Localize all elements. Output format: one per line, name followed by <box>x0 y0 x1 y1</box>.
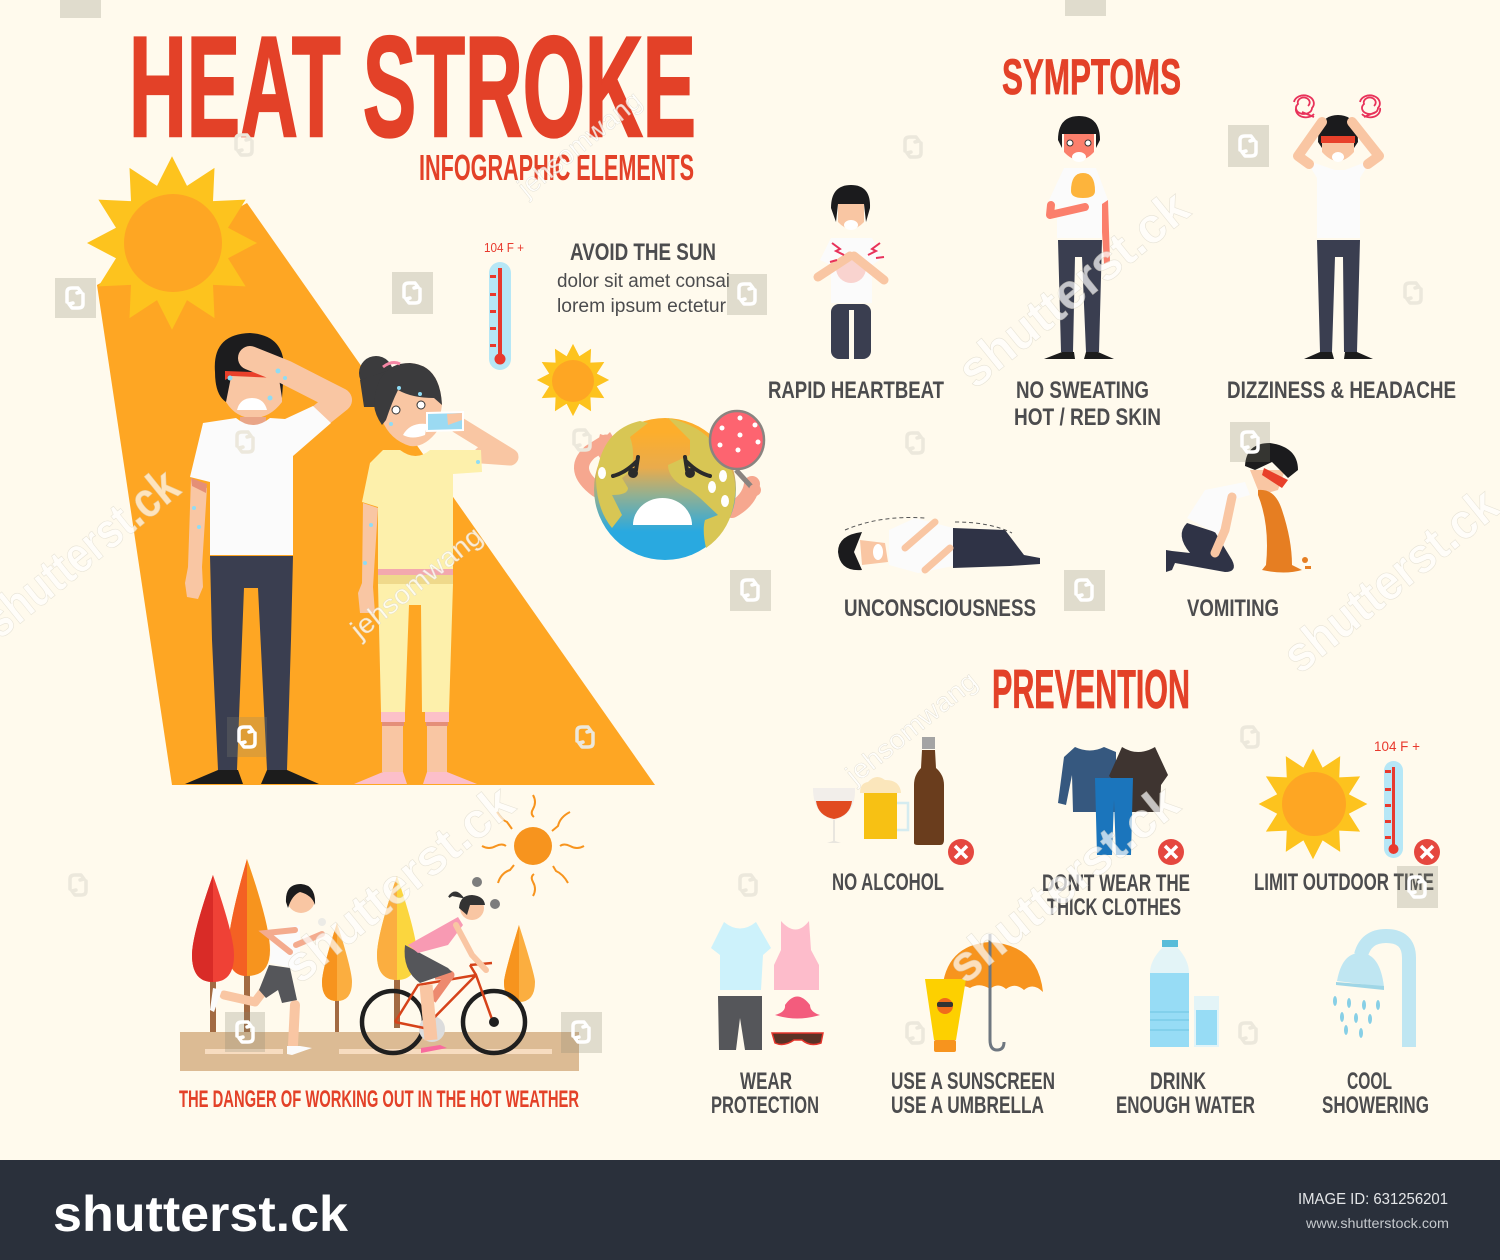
figure: no sweating hot red skin <box>1044 116 1114 359</box>
heading: symptoms: SYMPTOMS <box>1002 49 1181 105</box>
icon: thick clothes <box>1058 747 1168 855</box>
thermometer <box>489 262 511 370</box>
label: sunscreen and umbrella: USE A UMBRELLA <box>891 1092 1044 1119</box>
figure: woman drinking water <box>354 356 510 784</box>
subtitle: INFOGRAPHIC ELEMENTS <box>419 147 694 188</box>
watermark text <box>0 85 1500 994</box>
label: sunscreen and umbrella <box>891 1068 1055 1119</box>
road <box>180 1032 579 1071</box>
icon: shower <box>1333 936 1409 1047</box>
temperature label prevention: 104 F + <box>1374 738 1420 754</box>
orange sun beam <box>97 203 655 785</box>
watermark text: shutterst.ck <box>947 179 1200 399</box>
icon: protective clothing <box>711 921 823 1050</box>
label: don't wear thick clothes: DON'T WEAR THE <box>1042 870 1190 897</box>
figure: unconscious person lying down <box>838 518 1040 573</box>
label: wear protection: PROTECTION <box>711 1092 819 1119</box>
label: cool showering <box>1322 1068 1429 1119</box>
trees <box>192 859 535 1032</box>
avoid the sun text block: lorem ipsum ectetur <box>557 296 727 317</box>
figure: man with heat stroke <box>185 333 340 784</box>
label: rapid heartbeat: RAPID HEARTBEAT <box>768 377 944 404</box>
avoid the sun text block: AVOID THE SUN <box>570 239 716 266</box>
icon: sun and thermometer limit outdoor <box>1259 749 1403 859</box>
watermark text: jehsomwang <box>344 521 488 645</box>
label: cool showering: COOL <box>1347 1068 1392 1095</box>
icon: small sun <box>537 344 609 416</box>
watermark text: jehsomwang <box>839 666 983 790</box>
label: wear protection <box>711 1068 819 1119</box>
avoid the sun text block <box>557 239 730 317</box>
runner <box>210 884 326 1055</box>
label: wear protection: WEAR <box>740 1068 792 1095</box>
cyclist on bicycle <box>362 877 525 1053</box>
icon: sunscreen and umbrella <box>925 934 1043 1052</box>
footer image id: IMAGE ID: 631256201 <box>1298 1191 1448 1208</box>
label: drink enough water <box>1116 1068 1255 1119</box>
label: no sweating: HOT / RED SKIN <box>1014 404 1161 431</box>
figure: vomiting person <box>1166 443 1311 572</box>
footer logo: shutterst.ck <box>53 1186 348 1242</box>
avoid the sun text block: dolor sit amet consai <box>557 271 730 292</box>
label: no sweating: NO SWEATING <box>1016 377 1149 404</box>
icon: red x clothes <box>1158 839 1184 865</box>
watermark text: shutterst.ck <box>272 774 525 994</box>
label: no sweating <box>1014 377 1161 431</box>
watermark squares <box>55 0 1438 1053</box>
footer bar <box>0 1160 1500 1260</box>
label: cool showering: SHOWERING <box>1322 1092 1429 1119</box>
icon: red x outdoor <box>1414 839 1440 865</box>
watermark swirls <box>67 135 1425 1043</box>
heading: prevention: PREVENTION <box>992 658 1190 720</box>
figure: dizziness and headache <box>1294 95 1380 359</box>
icon: no alcohol <box>813 737 944 845</box>
icon: large sun <box>87 156 257 330</box>
watermark text: shutterst.ck <box>937 774 1190 994</box>
footer url: www.shutterstock.com <box>1305 1215 1449 1231</box>
label: unconsciousness: UNCONSCIOUSNESS <box>844 595 1036 622</box>
scene: working out in hot weather <box>180 795 584 1071</box>
label: sunscreen and umbrella: USE A SUNSCREEN <box>891 1068 1055 1095</box>
label: don't wear thick clothes: THICK CLOTHES <box>1047 894 1181 921</box>
figure: rapid heartbeat <box>818 185 884 359</box>
temperature label: 104 F + <box>484 240 524 255</box>
icon: crying earth with fan <box>581 411 764 560</box>
label: drink enough water: DRINK <box>1150 1068 1206 1095</box>
icon: red x alcohol <box>948 839 974 865</box>
icon: water bottle and glass <box>1150 940 1219 1047</box>
sun with rays <box>482 795 584 896</box>
title: HEAT STROKE <box>129 8 696 167</box>
watermark text: jehsomwang <box>511 85 647 203</box>
label: don't wear thick clothes <box>1042 870 1190 921</box>
label: no alcohol: NO ALCOHOL <box>832 869 944 896</box>
label: drink enough water: ENOUGH WATER <box>1116 1092 1255 1119</box>
caption: danger of working out: THE DANGER OF WORKING OUT IN THE HOT WEATHER <box>179 1086 579 1113</box>
label: vomiting: VOMITING <box>1187 595 1279 622</box>
